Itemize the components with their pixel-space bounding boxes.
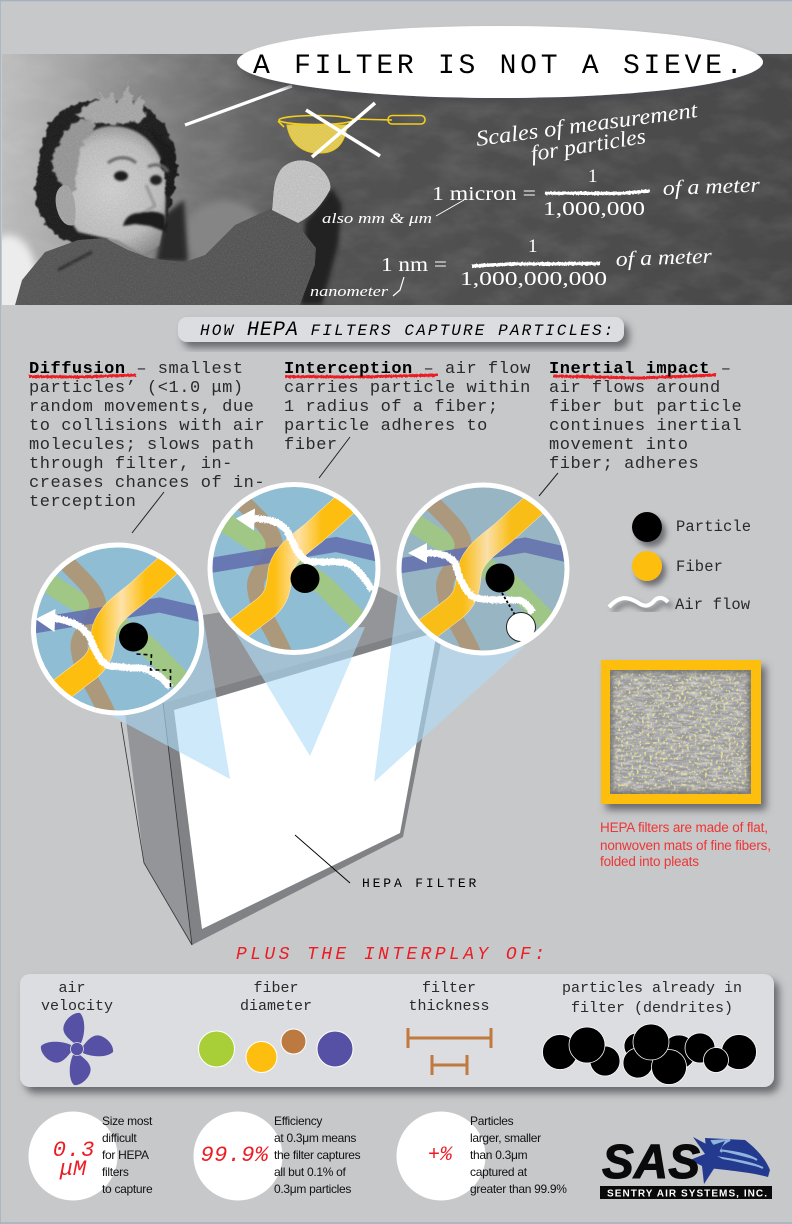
- text: inertial impact: fiber but particle: [549, 398, 742, 417]
- hair: dark mass: [36, 100, 177, 245]
- stat: 99.9%: [194, 1112, 361, 1200]
- logo: Sentry Air Systems: [600, 1136, 772, 1200]
- legend: fiber: Fiber: [676, 558, 723, 576]
- logo: Sentry Air Systems: SAS: [602, 1136, 700, 1189]
- text: diffusion: creases chances of in-: [29, 474, 265, 493]
- stat: plus percent: Particles: [470, 1114, 514, 1128]
- chalk equation: micron: of a meter: [662, 173, 761, 200]
- stat: 99.9%: at 0.3μm means: [274, 1131, 356, 1145]
- hepa filter label: [295, 835, 479, 891]
- chalk equation: nanometer: 1,000,000,000: [460, 268, 607, 290]
- text: diffusion: terception: [29, 493, 136, 512]
- icon: dendrite particles: [542, 1024, 756, 1084]
- text: inertial impact: fiber; adheres: [549, 455, 699, 474]
- legend: air flow: Air flow: [675, 596, 751, 614]
- chalk heading: scales of measurement: for particles: [529, 123, 647, 166]
- caption: fiber mats: folded into pleats: [600, 854, 699, 869]
- hepa filter label: HEPA FILTER: [362, 876, 479, 891]
- fiber mat swatch with yellow frame: [601, 660, 761, 804]
- jacket: [15, 208, 316, 305]
- panel: interplay factors: [20, 974, 774, 1087]
- chalk equation: nanometer: of a meter: [615, 244, 713, 271]
- fiber diameter label: diameter: [240, 998, 312, 1015]
- stat: 99.9%: Efficiency: [274, 1114, 322, 1128]
- heading pill: how HEPA filters capture particles: HOW HEPA FILTERS CAPTURE PARTICLES:: [200, 319, 615, 342]
- text: interception: [284, 360, 531, 455]
- text: interception: carries particle within: [284, 379, 531, 398]
- text: diffusion: Diffusion – smallest: [29, 360, 244, 379]
- caption: fiber mats: nonwoven mats of fine fibers,: [600, 838, 771, 853]
- chalk equation: nanometer: 1 nm =: [381, 254, 447, 276]
- photo: Einstein at the chalkboard: [2, 54, 792, 305]
- filter thickness label: filter: [422, 980, 476, 997]
- chalk heading: scales of measurement: [474, 97, 700, 166]
- text: diffusion: particles’ (<1.0 μm): [29, 379, 244, 398]
- caption: fiber mats: HEPA filters are made of flat,: [600, 820, 768, 835]
- stat: 0.3 micron: Size most: [102, 1114, 153, 1128]
- text: interception: particle adheres to: [284, 417, 488, 436]
- text: interception: 1 radius of a fiber;: [284, 398, 499, 417]
- logo: Sentry Air Systems: SENTRY AIR SYSTEMS, INC.: [607, 1188, 767, 1200]
- icon: thickness bars: [408, 1028, 491, 1075]
- stat: 0.3 micron: [28, 1112, 153, 1200]
- pointer lines from text to circles: [132, 437, 558, 533]
- heading: plus the interplay of: PLUS THE INTERPLAY OF:: [236, 945, 548, 965]
- legend: particle: [632, 512, 751, 542]
- stat: 99.9%: the filter captures: [274, 1148, 361, 1162]
- air velocity label: air: [58, 980, 86, 997]
- stat: 0.3 micron: 0.3: [53, 1138, 95, 1163]
- stat: plus percent: larger, smaller: [470, 1131, 541, 1145]
- text: inertial impact: continues inertial: [549, 417, 742, 436]
- stat: 0.3 micron: μM: [59, 1157, 87, 1182]
- speech bubble with title: A FILTER IS NOT A SIEVE.: [253, 51, 746, 82]
- chalk equation: nanometer: [310, 236, 713, 300]
- text: diffusion: through filter, in-: [29, 455, 233, 474]
- stat: plus percent: captured at: [470, 1165, 528, 1179]
- chalk equation: micron: [322, 166, 761, 227]
- particles already in filter label: filter (dendrites): [571, 1000, 733, 1017]
- icon: fan: [41, 1013, 113, 1085]
- ear: [56, 185, 76, 226]
- hair: light temple tuft: [52, 118, 97, 192]
- icon: crossed-out sieve: [278, 103, 425, 157]
- HEPA filter box: [121, 587, 448, 945]
- icon: fiber diameters: [198, 1029, 353, 1072]
- legend: particle: Particle: [676, 518, 751, 536]
- text: inertial impact: [549, 360, 742, 474]
- magnification cones: [110, 593, 524, 782]
- stat: plus percent: greater than 99.9%: [470, 1182, 567, 1196]
- text: diffusion: to collisions with air: [29, 417, 265, 436]
- speech bubble with title: [237, 26, 763, 98]
- chalk equation: micron: also mm & μm: [322, 211, 432, 227]
- stat: 0.3 micron: filters: [102, 1165, 129, 1179]
- text: inertial impact: air flows around: [549, 379, 721, 398]
- circle: diffusion detail: [28, 545, 208, 719]
- circle: inertial impact detail: [393, 485, 573, 659]
- stat: 0.3 micron: difficult: [102, 1131, 137, 1145]
- hair: dark right temple: [158, 156, 180, 198]
- chalk heading: scales of measurement: Scales of measurement: [474, 97, 700, 151]
- air velocity label: velocity: [41, 998, 113, 1015]
- chalk equation: micron: 1: [588, 166, 598, 187]
- legend: fiber: [632, 551, 723, 581]
- circle: interception detail: [204, 484, 384, 658]
- speech bubble pointer: [185, 86, 292, 125]
- hand: [272, 160, 330, 223]
- stat: 0.3 micron: for HEPA: [102, 1148, 149, 1162]
- fiber diameter label: fiber: [253, 980, 299, 997]
- particles already in filter label: particles already in: [562, 980, 742, 997]
- hair: light wisps on top: [76, 80, 146, 124]
- stat: plus percent: [396, 1112, 567, 1200]
- stat: 0.3 micron: to capture: [102, 1182, 153, 1196]
- text: diffusion: [29, 360, 265, 512]
- chalk equation: nanometer: nanometer: [310, 284, 388, 300]
- chalk equation: nanometer: 1: [528, 236, 538, 257]
- text: inertial impact: Inertial impact –: [549, 360, 731, 379]
- chalk equation: micron: 1,000,000: [543, 198, 645, 220]
- stat: plus percent: than 0.3μm: [470, 1148, 528, 1162]
- text: interception: Interception – air flow: [284, 360, 531, 379]
- stat: 99.9%: 99.9%: [200, 1143, 270, 1168]
- stat: plus percent: +%: [428, 1144, 453, 1167]
- legend: air flow: [609, 596, 751, 614]
- text: inertial impact: movement into: [549, 436, 689, 455]
- filter thickness label: thickness: [408, 998, 490, 1015]
- stat: 99.9%: 0.3μm particles: [274, 1182, 351, 1196]
- caption: fiber mats: [600, 820, 771, 869]
- text: diffusion: molecules; slows path: [29, 436, 254, 455]
- stat: 99.9%: all but 0.1% of: [274, 1165, 347, 1179]
- text: diffusion: random movements, due: [29, 398, 254, 417]
- chalk equation: micron: 1 micron =: [432, 183, 536, 205]
- face: [64, 126, 166, 256]
- text: interception: fiber: [284, 436, 338, 455]
